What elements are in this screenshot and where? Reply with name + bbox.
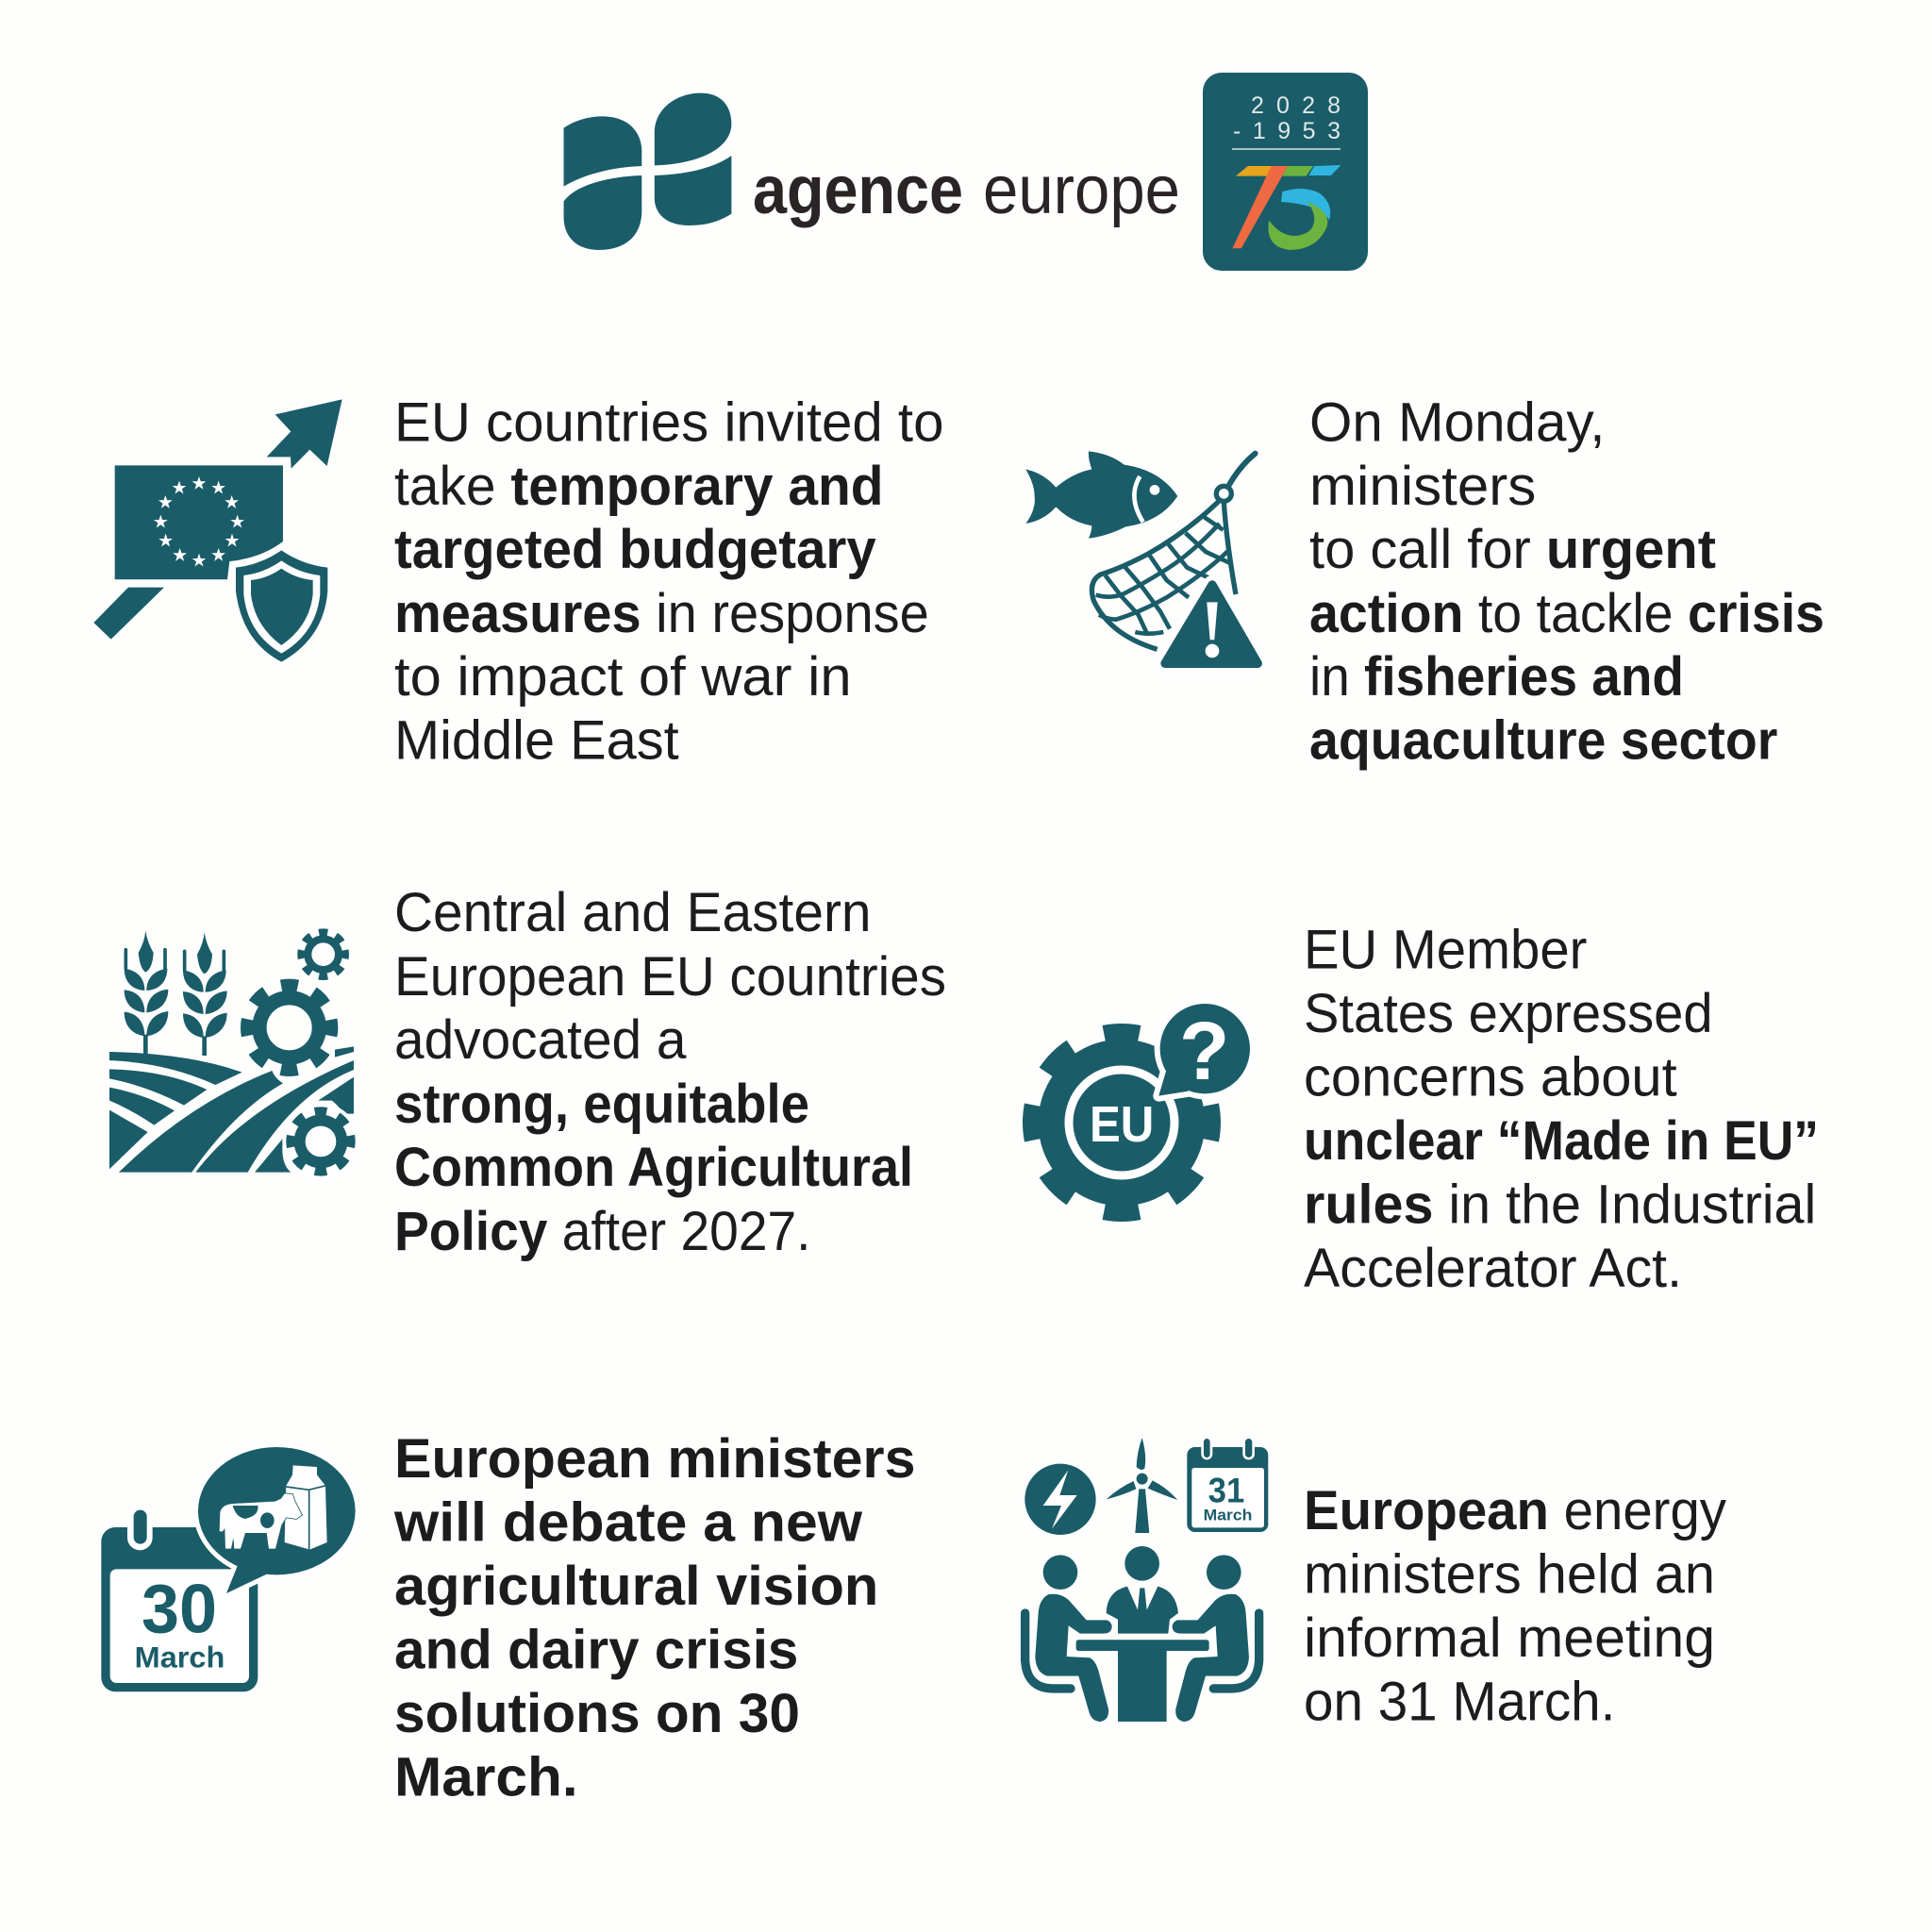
text: ministers debate (393, 1428, 915, 1807)
text: ministers debate: solutions on 30 (394, 1683, 800, 1744)
logo mark (564, 93, 731, 250)
text: Made in EU rules: States expressed (1304, 983, 1713, 1044)
icon: wheat, fields and gears (109, 931, 359, 1180)
text: energy ministers: ministers held an (1304, 1543, 1715, 1606)
icon: energy ministers meeting (1024, 1437, 1268, 1722)
icon: energy ministers meeting: March (1204, 1507, 1252, 1524)
text: Common Agricultural Policy: Common Agricultural (394, 1137, 913, 1198)
text: fisheries crisis: On Monday, (1309, 392, 1606, 453)
icon: EU flag with arrow and shield (93, 399, 342, 662)
text: energy ministers: European energy (1304, 1480, 1726, 1541)
text: energy ministers: informal meeting (1304, 1607, 1715, 1669)
text: Made in EU rules: EU Member (1304, 919, 1587, 981)
text: fisheries crisis: in fisheries and (1309, 646, 1684, 708)
text: Made in EU rules: concerns about (1304, 1047, 1677, 1108)
icon: fish, net and warning (1025, 451, 1257, 663)
text: budgetary measures (394, 392, 943, 772)
logo: agence europe (564, 93, 963, 250)
icon: 30 March calendar with dairy bubble: 30 (142, 1571, 217, 1648)
text: fisheries crisis: to call for urgent (1309, 519, 1716, 580)
text: budgetary measures: targeted budgetary (394, 519, 876, 580)
text: Common Agricultural Policy: strong, equitable (394, 1074, 809, 1135)
icon: energy ministers meeting: 31 (1208, 1471, 1244, 1509)
text: budgetary measures: EU countries invited to (394, 392, 943, 453)
text: energy ministers (1304, 1480, 1726, 1732)
75th anniversary badge: -1953 (1233, 118, 1341, 144)
text: ministers debate: agricultural vision (394, 1556, 878, 1617)
text: Common Agricultural Policy: Policy after 2027. (394, 1201, 811, 1262)
text: energy ministers: on 31 March. (1304, 1672, 1615, 1732)
logo wordmark: agence (753, 153, 963, 228)
text: budgetary measures: measures in response (394, 583, 929, 644)
text: Made in EU rules (1304, 919, 1819, 1299)
text: Common Agricultural Policy: Central and Eastern (394, 882, 872, 943)
text: Common Agricultural Policy (394, 882, 946, 1262)
icon: EU gear with question bubble: EU (1090, 1097, 1154, 1153)
text: Made in EU rules: rules in the Industrial (1304, 1174, 1816, 1236)
text: budgetary measures: to impact of war in (394, 646, 852, 708)
text: budgetary measures: Middle East (394, 709, 679, 772)
icon: EU gear with question bubble (1032, 1004, 1250, 1212)
text: Made in EU rules: Accelerator Act. (1304, 1238, 1682, 1299)
text: ministers debate: will debate a new (393, 1492, 863, 1553)
75th anniversary badge: 2028 (1251, 92, 1341, 119)
icon: 30 March calendar with dairy bubble: March (135, 1640, 225, 1674)
wordmark second word: europe (983, 153, 1180, 228)
text: fisheries crisis: action to tackle crisis (1309, 583, 1824, 644)
text: Common Agricultural Policy: advocated a (394, 1009, 687, 1071)
text: ministers debate: March. (394, 1747, 578, 1807)
text: Common Agricultural Policy: European EU countries (394, 946, 946, 1008)
text: fisheries crisis: aquaculture sector (1309, 709, 1777, 772)
icon: 30 March calendar with dairy bubble (101, 1447, 356, 1691)
text: ministers debate: European ministers (394, 1428, 915, 1490)
text: budgetary measures: take temporary and (394, 456, 883, 517)
text: fisheries crisis (1309, 392, 1824, 772)
75th anniversary badge (1203, 73, 1368, 271)
icon: EU gear with question bubble: ? (1179, 1005, 1229, 1097)
text: Made in EU rules: unclear “Made in EU” (1304, 1110, 1819, 1172)
text: ministers debate: and dairy crisis (394, 1619, 798, 1681)
text: fisheries crisis: ministers (1309, 456, 1536, 517)
